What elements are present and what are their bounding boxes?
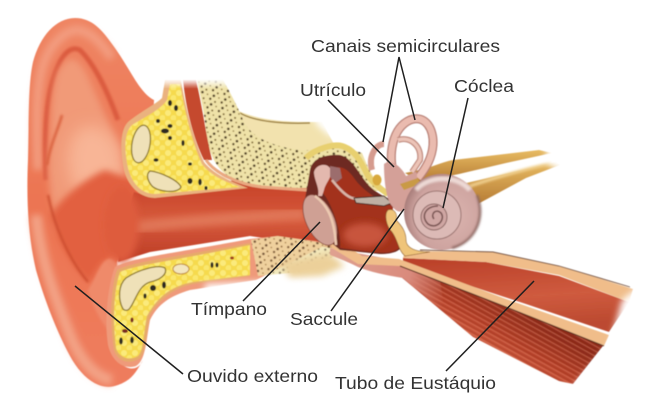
pointer: canais semicirculares (383, 57, 415, 142)
air cell left (129, 124, 153, 164)
vestibular nerve (405, 150, 552, 182)
eardrum (296, 190, 344, 250)
label: Saccule: Saccule (290, 309, 358, 329)
soft fade to white below bone (205, 282, 345, 304)
panel: Eustachian tube (328, 240, 652, 404)
soft fade above bones (160, 72, 232, 84)
panel: external ear (pinna) (27, 18, 154, 387)
tan fibres below (280, 253, 345, 278)
cavity red chamber (322, 167, 402, 253)
muscle fibres (400, 264, 603, 384)
pointer: saccule (331, 209, 404, 311)
cochlea third whorl (421, 204, 447, 230)
central peach band (328, 240, 609, 346)
stapes (354, 196, 392, 206)
air cell bottom (148, 171, 181, 191)
cochlea outer highlight (416, 179, 470, 190)
central band line (400, 266, 604, 346)
dark vessels (154, 100, 208, 190)
large canal loop (391, 119, 433, 178)
panel: golden nerves (405, 142, 578, 205)
malleus (314, 165, 331, 196)
outer skin around bone (106, 236, 330, 367)
outer ear silhouette (27, 18, 154, 387)
label: Canais semicirculares: Canais semicirculares (311, 36, 500, 56)
panel: inner ear (371, 119, 480, 250)
upper band line (420, 250, 630, 287)
pale bone behind (232, 108, 335, 170)
artery (183, 80, 212, 160)
label: Cóclea: Cóclea (454, 76, 514, 96)
concha crease (48, 195, 88, 282)
panel: upper temporal bone (121, 80, 388, 198)
vestibule nerve root (400, 178, 420, 190)
cochlear nerve (462, 162, 560, 205)
label: Ouvido externo: Ouvido externo (187, 366, 318, 386)
inner canal loop (398, 139, 420, 172)
oval window bone (386, 210, 430, 256)
concha (50, 170, 150, 283)
nerve fade (546, 142, 578, 170)
middle ear wall (315, 196, 336, 245)
cochlea body (404, 174, 480, 250)
muscle layer (400, 264, 603, 384)
lower vessels (119, 256, 234, 345)
canal highlight (130, 214, 305, 228)
red lumen (403, 258, 629, 332)
ear canal (118, 170, 345, 262)
pointer: cóclea (443, 98, 468, 208)
cavity dark wall (304, 155, 403, 254)
label: Tímpano: Tímpano (191, 299, 267, 319)
spongy bone band (197, 80, 384, 196)
lower spongy bone (251, 236, 335, 276)
cavity lighter glow (343, 223, 387, 247)
cochlea spiral (424, 206, 442, 226)
lower rim highlight (36, 215, 112, 380)
fade at tube end (570, 280, 652, 404)
panel: middle ear cavity (296, 155, 430, 256)
label: Tubo de Eustáquio: Tubo de Eustáquio (335, 373, 496, 393)
incus (330, 166, 342, 184)
yellow marrow upper (121, 80, 248, 198)
nerve highlight (470, 163, 552, 186)
pointer: tubo de Eustáquio (446, 281, 534, 371)
pale bone top line (240, 113, 310, 123)
large canal loop outer (391, 119, 433, 178)
antihelix light centre (68, 126, 124, 200)
pink outer tissue (330, 248, 445, 312)
antitragus (88, 259, 118, 330)
bone outline (111, 243, 250, 362)
label: Utrículo: Utrículo (300, 80, 366, 100)
small rear canal (371, 144, 384, 170)
pointer: tímpano (243, 222, 320, 301)
panel: lower temporal bone (106, 236, 345, 367)
antihelix and scapha (48, 60, 124, 235)
pale bone fade (312, 100, 352, 136)
helix highlight (37, 30, 112, 170)
vestibule and utricle (384, 162, 417, 212)
pointer: ouvido externo (75, 286, 183, 374)
inner canal loop light (398, 139, 420, 172)
cochlea second whorl (413, 191, 461, 239)
fold crease (47, 115, 62, 165)
lower air cell long (120, 267, 166, 310)
helix inner shadow (45, 49, 118, 180)
yellow node on bone (372, 174, 382, 186)
lower air cell small (173, 264, 189, 274)
ossicle arm (332, 180, 362, 200)
pointer: utrículo (328, 100, 394, 167)
marrow fill (125, 84, 240, 194)
yellow marrow lower (114, 245, 250, 358)
canal lining (206, 160, 335, 192)
upper peach band (403, 251, 633, 302)
canal to concha blend (105, 187, 139, 263)
yellow rim over cavity (306, 146, 388, 194)
cochlea right shadow (452, 195, 480, 248)
